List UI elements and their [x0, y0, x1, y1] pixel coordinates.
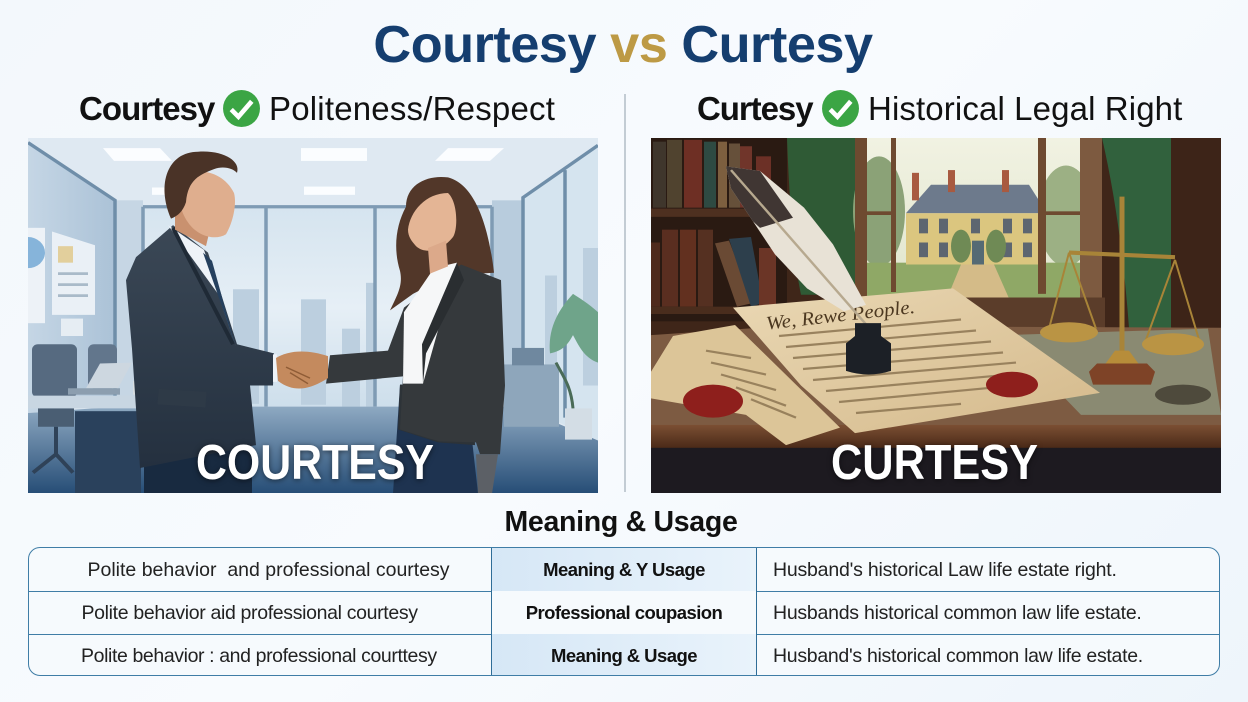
- row 2: [29, 591, 1219, 635]
- heading: curtesy: Historical Legal Right: [868, 90, 1182, 127]
- image caption: courtesy: COURTESY: [196, 436, 434, 490]
- heading: courtesy: Courtesy: [79, 90, 214, 127]
- floor: [28, 407, 598, 494]
- curtains: [787, 138, 855, 295]
- row 3: Polite behavior : and professional courttesy: [81, 645, 437, 667]
- heading: courtesy: Politeness/Respect: [269, 90, 555, 127]
- row 1: Polite behavior and professional courtesy: [88, 559, 450, 581]
- desk and chairs: [28, 344, 143, 494]
- heading: meaning and usage: Meaning & Usage: [504, 506, 738, 538]
- inkwell: [846, 323, 891, 375]
- parchment documents: [651, 288, 1100, 445]
- room background: [28, 138, 598, 494]
- man head: [175, 202, 211, 246]
- quill feather: [726, 166, 869, 328]
- row 3: Husband's historical common law life estate.: [773, 645, 1143, 667]
- panel: legal document illustration: [651, 138, 1221, 493]
- document heading: We, Rewe People.: [765, 297, 916, 334]
- image caption: curtesy: CURTESY: [831, 436, 1038, 490]
- bookshelf: [651, 138, 787, 321]
- room wall: [651, 138, 1221, 494]
- row 2: Professional coupasion: [526, 602, 722, 623]
- row 1: Husband's historical Law life estate right.: [773, 559, 1117, 581]
- woman in suit: [326, 177, 505, 494]
- row 3: [81, 634, 1143, 675]
- skyline: [233, 248, 598, 407]
- center divider: [624, 94, 626, 492]
- manor house: [906, 170, 1047, 265]
- lawn: [867, 263, 1083, 298]
- wall charts: [28, 228, 95, 336]
- heading: courtesy: [79, 90, 555, 127]
- scales of justice: [1040, 197, 1204, 385]
- woman hair: [390, 177, 494, 310]
- table: [651, 326, 1221, 427]
- wax seals: [683, 372, 1038, 418]
- row 3: Meaning & Usage: [551, 645, 697, 666]
- heading: curtesy: Curtesy: [697, 90, 813, 127]
- row 1: [29, 548, 1219, 592]
- ceiling lights: [103, 148, 504, 195]
- man in suit: [126, 152, 277, 494]
- window view: [855, 138, 1083, 298]
- panel: office illustration: [28, 138, 598, 493]
- handshake: [276, 352, 328, 389]
- window frames: [855, 138, 1102, 326]
- comparison table: [28, 547, 1220, 676]
- title: Courtesy vs Curtesy: [373, 16, 873, 74]
- row 2: Polite behavior aid professional courtesy: [82, 602, 418, 624]
- heading: curtesy: [697, 90, 1182, 127]
- row 2: Husbands historical common law life estate.: [773, 602, 1142, 624]
- row 1: Meaning & Y Usage: [543, 559, 705, 580]
- cabinet and plant: [504, 294, 598, 440]
